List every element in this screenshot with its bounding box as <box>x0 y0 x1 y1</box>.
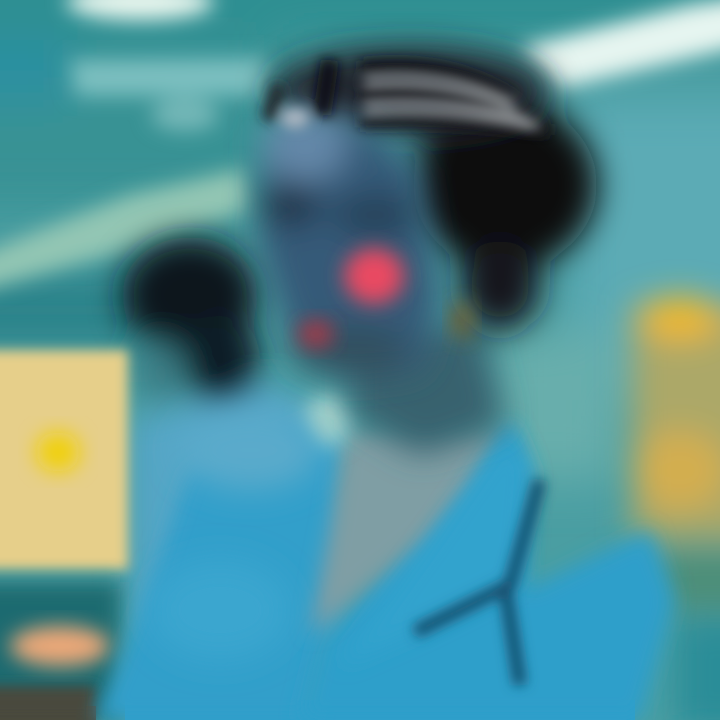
undershirt <box>310 432 500 635</box>
lapel <box>410 431 536 558</box>
right shelf objects <box>632 296 720 720</box>
ceiling lights <box>0 0 720 296</box>
yellow panel <box>0 350 128 570</box>
ear accent <box>451 300 473 340</box>
neck <box>350 320 505 455</box>
scrub seam <box>415 480 540 685</box>
hair back <box>270 46 597 330</box>
hair stripes <box>268 60 550 130</box>
background person <box>122 237 340 640</box>
collar highlight <box>304 394 352 446</box>
face <box>258 109 440 380</box>
yellow spot <box>36 432 80 472</box>
wall shading <box>0 0 720 480</box>
main figure scrubs <box>95 394 675 720</box>
red cheek <box>344 248 404 304</box>
lips <box>298 320 334 348</box>
lower left desk <box>0 582 120 720</box>
